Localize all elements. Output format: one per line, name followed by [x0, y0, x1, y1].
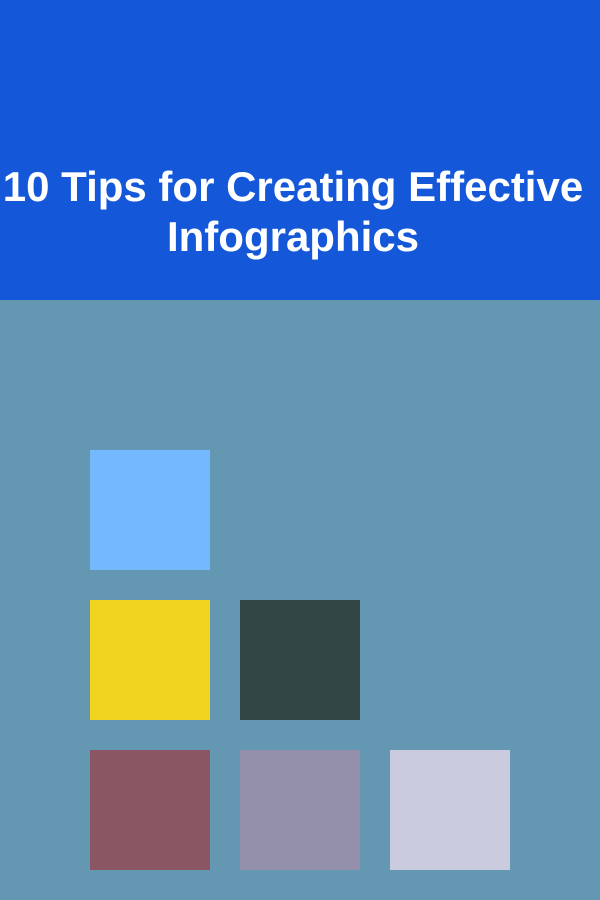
swatch: dark green [240, 600, 360, 720]
header banner [0, 0, 600, 300]
title: 10 Tips for Creating Effective Infographics [3, 163, 583, 260]
swatch: yellow [90, 600, 210, 720]
swatch: pale lavender [390, 750, 510, 870]
swatch: maroon [90, 750, 210, 870]
swatch: light blue [90, 450, 210, 570]
swatch: muted purple [240, 750, 360, 870]
